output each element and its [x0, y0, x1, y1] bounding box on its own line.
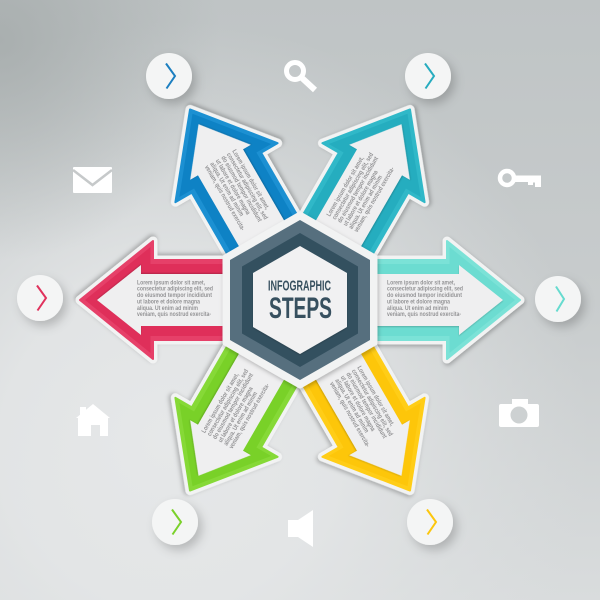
text: green arrow: ut labore et dolore magna: [217, 386, 255, 444]
text: teal arrow: do eiusmod tempor incididunt: [337, 155, 380, 224]
text: blue arrow: veniam, quis nostrud exercita-: [203, 164, 246, 232]
text: blue arrow: [203, 148, 274, 234]
button: bottom right: [407, 499, 453, 545]
button: top right: [405, 53, 451, 99]
text: aqua arrow: Lorem ipsum dolor sit amet,: [387, 279, 455, 286]
text: teal arrow: Lorem ipsum dolor sit amet,: [326, 155, 366, 218]
icon: search: [286, 62, 315, 90]
text: teal arrow: [326, 148, 397, 234]
arrow: teal upper right: [279, 80, 461, 278]
text: aqua arrow: do eiusmod tempor incididunt: [387, 292, 463, 299]
button: top left: [146, 53, 192, 99]
text: teal arrow: ut labore et dolore magna: [342, 169, 380, 227]
text: red arrow: [137, 279, 213, 318]
arrow: green lower left: [139, 322, 321, 520]
text: red arrow: Lorem ipsum dolor sit amet,: [137, 279, 205, 286]
text: blue arrow: consectetur adipiscing elit, sed: [225, 152, 269, 221]
text: red arrow: do eiusmod tempor incididunt: [137, 292, 213, 299]
text: red arrow: aliqua. Ut enim ad minim: [137, 305, 198, 312]
text: aqua arrow: aliqua. Ut enim ad minim: [387, 305, 448, 312]
icon: camera: [499, 399, 539, 427]
text: red arrow: ut labore et dolore magna: [137, 298, 200, 306]
text: yellow arrow: Lorem ipsum dolor sit amet,: [355, 365, 396, 428]
icon: home: [76, 404, 110, 436]
text: aqua arrow: ut labore et dolore magna: [387, 298, 450, 306]
text: yellow arrow: consectetur adipiscing elit, sed: [350, 368, 394, 438]
text: green arrow: veniam, quis nostrud exercita-: [228, 383, 271, 450]
heading: infographic: INFOGRAPHIC: [268, 278, 331, 294]
icon: key: [500, 171, 541, 187]
button: right: [535, 276, 581, 322]
icon: speaker: [288, 510, 313, 547]
icon: envelope: [73, 167, 112, 193]
central hexagon: [225, 214, 375, 386]
text: blue arrow: Lorem ipsum dolor sit amet,: [230, 148, 271, 211]
text: yellow arrow: [328, 365, 399, 450]
arrow: red left: [80, 241, 240, 359]
text: blue arrow: aliqua. Ut enim ad minim: [208, 161, 245, 218]
text: green arrow: consectetur adipiscing elit, sed: [206, 368, 250, 438]
text: yellow arrow: aliqua. Ut enim ad minim: [333, 378, 370, 434]
text: green arrow: do eiusmod tempor incididunt: [212, 372, 255, 441]
text: red arrow: consectetur adipiscing elit, sed: [137, 286, 213, 293]
heading: steps: STEPS: [269, 292, 332, 325]
text: teal arrow: veniam, quis nostrud exercita-: [353, 166, 396, 234]
text: yellow arrow: do eiusmod tempor incididunt: [344, 371, 388, 440]
button: bottom left: [152, 499, 198, 545]
text: red arrow: veniam, quis nostrud exercita-: [137, 311, 211, 318]
text: green arrow: Lorem ipsum dolor sit amet,: [201, 372, 241, 434]
text: teal arrow: consectetur adipiscing elit, sed: [331, 152, 375, 221]
text: aqua arrow: veniam, quis nostrud exercita-: [387, 311, 461, 318]
text: teal arrow: aliqua. Ut enim ad minim: [348, 174, 384, 231]
text: blue arrow: ut labore et dolore magna: [214, 158, 251, 216]
text: yellow arrow: veniam, quis nostrud exercita-: [328, 381, 371, 448]
text: aqua arrow: consectetur adipiscing elit, sed: [387, 286, 463, 293]
button: left: [17, 275, 63, 321]
text: blue arrow: do eiusmod tempor incididunt: [219, 155, 263, 224]
arrow: aqua right: [360, 241, 520, 359]
arrow: yellow lower right: [279, 322, 461, 520]
text: aqua arrow: [387, 279, 463, 318]
text: green arrow: aliqua. Ut enim ad minim: [223, 391, 259, 447]
arrow: blue upper left: [139, 80, 321, 278]
text: yellow arrow: ut labore et dolore magna: [339, 375, 376, 433]
text: green arrow: [201, 365, 272, 450]
